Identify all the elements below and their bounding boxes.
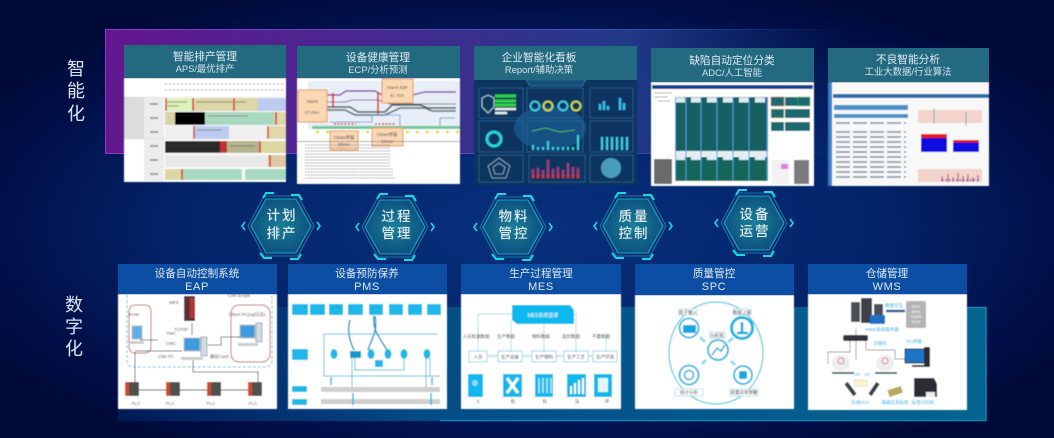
- MES diagram: 生产设备: [501, 354, 519, 360]
- MES diagram: 人员检测数据: [462, 333, 490, 340]
- hexagon: quality: 控制: [618, 226, 650, 241]
- EAP diagram: CIM Scope: [228, 293, 251, 298]
- panel: yield analysis: 工业大数据/行业算法: [865, 66, 951, 77]
- panel: Report: Report/辅助决策: [505, 64, 574, 75]
- panel: PMS: 设备预防保养: [335, 267, 399, 280]
- WMS diagram: 交换机: [873, 340, 887, 347]
- ECP screenshot: Alarm 82#: [387, 85, 408, 90]
- WMS diagram: WMS系统服务器: [865, 326, 899, 333]
- EAP diagram: CIM PC: [158, 354, 175, 359]
- band: intelligent layer: [105, 29, 850, 154]
- EAP diagram: TMC: [166, 331, 177, 336]
- MES diagram: 生产物料: [535, 354, 553, 360]
- hexagon: materials: 物料: [498, 209, 530, 224]
- panel: WMS: 仓储管理: [866, 267, 909, 280]
- WMS diagram: [808, 294, 967, 410]
- ECP screenshot: 41.70A: [390, 93, 404, 98]
- EAP diagram: 通信Card: [210, 353, 229, 360]
- WMS diagram: 标签打印机: [912, 399, 935, 406]
- hexagon: materials: [474, 194, 552, 260]
- panel: MES: MES: [528, 281, 554, 293]
- ADC screenshot: [651, 82, 814, 186]
- hexagon: process: [356, 194, 434, 260]
- panel: ECP: ECP/分析预测: [348, 64, 408, 75]
- SPC diagram: [635, 295, 794, 409]
- WMS diagram: AP: [864, 372, 870, 377]
- panel: yield analysis: [828, 48, 989, 186]
- heading: digital: [65, 295, 83, 359]
- WMS diagram: 基础信息标签: [882, 399, 909, 406]
- ECP header: [297, 46, 460, 78]
- WMS diagram: TQMS: [910, 314, 922, 319]
- SPC header: [635, 264, 794, 295]
- heading: intelligent: 化: [67, 104, 85, 124]
- SPC diagram: 质量异常预警: [730, 389, 758, 396]
- MES diagram: [461, 294, 621, 409]
- hexagon: quality: [594, 193, 672, 259]
- panel: Report: 企业智能化看板: [502, 51, 577, 64]
- panel: MES: [461, 264, 621, 409]
- PMS header: [288, 264, 447, 294]
- panel: APS: 智能排产管理: [173, 50, 237, 63]
- EAP diagram: CMC: [166, 341, 177, 346]
- EAP header: [118, 264, 277, 294]
- panel: ADC: ADC/人工智能: [702, 67, 763, 78]
- panel: PMS: [288, 264, 447, 409]
- heading: intelligent: 能: [67, 81, 85, 101]
- SPC diagram: 数据上报: [733, 309, 751, 316]
- SPC diagram: 统计分析: [680, 389, 698, 396]
- ECP screenshot: 27.04A: [305, 110, 319, 115]
- panel: MES: 生产过程管理: [509, 267, 573, 280]
- panel: ADC: [651, 48, 814, 186]
- heading: intelligent: [67, 59, 85, 124]
- WMS diagram: 数据交互: [885, 302, 903, 309]
- hexagon: equipment: [715, 190, 793, 256]
- panel: Report: [474, 46, 637, 185]
- WMS diagram: MES: [912, 309, 921, 314]
- heading: digital: 化: [65, 339, 83, 359]
- MES diagram: 机: [511, 398, 516, 405]
- WMS diagram: PC终端: [906, 338, 922, 345]
- panel: WMS: [808, 264, 967, 410]
- MES diagram: 环: [605, 399, 610, 405]
- panel: PMS: PMS: [354, 281, 380, 293]
- ECP screenshot: Clean停留: [377, 131, 398, 138]
- MES diagram: 法: [575, 398, 580, 405]
- band outline: [106, 30, 850, 154]
- WMS diagram: ERP: [912, 304, 920, 309]
- heading: digital: 字: [65, 317, 83, 337]
- ECP screenshot: Alarm: [306, 99, 318, 104]
- panel: EAP: 设备自动控制系统: [155, 267, 240, 280]
- panel: EAP: [118, 264, 277, 409]
- panel: SPC: 质量管控: [693, 267, 736, 280]
- yield screenshot: [828, 82, 989, 186]
- ECP screenshot: [297, 78, 460, 184]
- MES diagram: 生产环境: [596, 354, 614, 360]
- ECP screenshot: 10min: [381, 139, 394, 144]
- MES diagram: MES系统登录: [528, 312, 558, 319]
- panel: EAP: EAP: [185, 281, 209, 293]
- panel: WMS: WMS: [873, 281, 901, 293]
- EAP diagram: Client PC(sql日志): [229, 311, 266, 318]
- panel: ECP: 设备健康管理: [346, 51, 410, 64]
- MES diagram: 物料数据: [532, 333, 550, 340]
- hexagon: planning: 计划: [266, 208, 298, 223]
- hexagon: equipment: 设备: [740, 206, 770, 222]
- SPC diagram: 分析图: [710, 332, 724, 339]
- band edge: [440, 308, 986, 420]
- hexagon: process: 过程: [382, 209, 412, 224]
- EAP diagram: [118, 292, 277, 409]
- Report header: [474, 46, 637, 80]
- panel: SPC: SPC: [702, 281, 726, 293]
- panel: yield analysis: 不良智能分析: [876, 53, 940, 66]
- WMS diagram: AP: [854, 372, 860, 377]
- SPC diagram: 原子输入: [679, 309, 697, 316]
- hexagon: quality: 质量: [618, 209, 650, 224]
- panel: APS: [124, 45, 286, 182]
- panel: ECP: [297, 46, 460, 184]
- heading: intelligent: 智: [67, 59, 85, 79]
- APS header: [124, 45, 286, 78]
- EAP diagram: PLC: [166, 401, 175, 406]
- EAP diagram: MES: [169, 300, 179, 305]
- MES diagram: 生产工艺: [567, 354, 585, 360]
- hexagon: planning: 排产: [266, 226, 298, 241]
- MES diagram: 监控数据: [562, 333, 580, 340]
- MES diagram: 人员: [474, 354, 483, 360]
- EAP diagram: TCP/IP: [174, 327, 188, 332]
- PMS diagram: [288, 294, 447, 409]
- WMS diagram: 无线PDA: [851, 399, 869, 406]
- hexagon: process: 管理: [382, 225, 412, 241]
- yield header: [828, 48, 989, 82]
- hexagon: materials: 管控: [498, 225, 530, 241]
- EAP diagram: PLC: [132, 401, 141, 406]
- EAP diagram: PLC: [249, 401, 258, 406]
- hexagon: equipment: 运营: [740, 223, 770, 239]
- MES header: [461, 264, 621, 294]
- EAP diagram: KVM: [129, 312, 139, 317]
- MES diagram: 料: [543, 398, 548, 405]
- MES diagram: 人: [476, 399, 481, 404]
- WMS diagram: SCM: [912, 319, 920, 324]
- heading: digital: 数: [65, 295, 83, 315]
- MES diagram: 不量数据: [592, 333, 610, 340]
- panel: ADC: 缺陷自动定位分类: [689, 54, 775, 67]
- hexagon: planning: [242, 193, 320, 259]
- dashboard screenshot: [474, 79, 637, 185]
- panel: APS: APS/最优排产: [176, 63, 234, 74]
- APS screenshot: [124, 78, 286, 182]
- EAP diagram: PLC: [207, 401, 216, 406]
- MES diagram: 生产数据: [497, 333, 515, 340]
- panel: SPC: [635, 264, 794, 409]
- band: digital layer: [118, 307, 986, 421]
- ECP screenshot: Clean停留: [334, 134, 355, 141]
- ECP screenshot: 20min: [338, 142, 351, 147]
- WMS header: [808, 264, 967, 294]
- ADC header: [651, 48, 814, 82]
